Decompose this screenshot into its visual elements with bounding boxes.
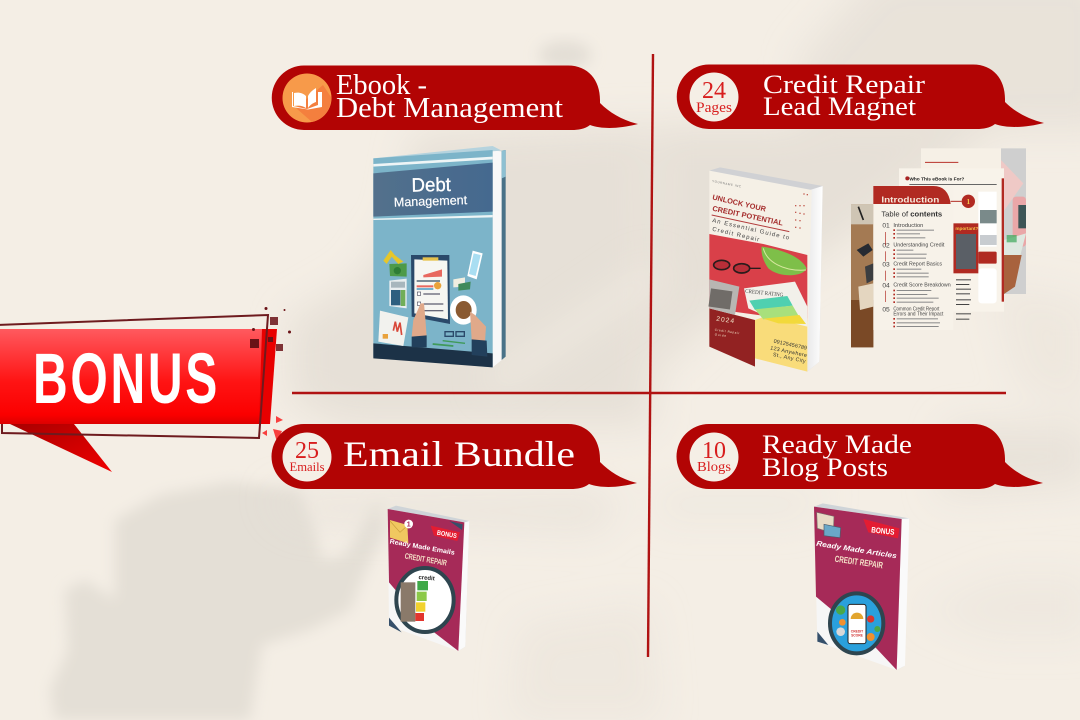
banner heading: BONUS <box>33 340 220 419</box>
page: who this ebook is for: Who This eBook is For? <box>909 176 964 182</box>
calculator <box>389 279 407 308</box>
page: table of contents: Introduction <box>893 223 923 229</box>
bubble: ebook debt management <box>272 66 638 130</box>
book: ready made emails <box>388 506 469 651</box>
book: credit repair guide: St., Any City <box>772 352 806 365</box>
badge: 24 pages: Pages <box>696 100 732 116</box>
bonus tag <box>431 526 460 541</box>
page: table of contents: Table of contents <box>881 209 942 218</box>
book: debt management <box>373 146 506 367</box>
book: ready made emails: credit <box>418 575 435 582</box>
page: table of contents: 03 <box>882 262 890 269</box>
bubble subheading: Blog Posts <box>762 453 888 482</box>
badge: 24 pages: 24 <box>702 78 726 104</box>
book: credit repair guide: UNLOCK YOUR <box>712 193 768 214</box>
badge: 10 blogs: 10 <box>702 438 726 464</box>
page: table of contents: 01 <box>882 222 890 229</box>
banner outline frame <box>0 315 268 438</box>
phone score circle <box>830 593 883 653</box>
book: credit repair guide: CREDIT RATING <box>745 289 784 299</box>
page: back <box>921 148 1026 294</box>
book: credit repair guide <box>708 167 823 372</box>
divider: horizontal <box>292 392 1006 394</box>
envelope <box>390 520 408 543</box>
page: table of contents: 02 <box>882 242 890 249</box>
bubble: email bundle <box>272 424 637 489</box>
bubble heading: Ready Made <box>762 430 912 459</box>
book: credit repair guide: An Essential Guide to <box>712 218 790 242</box>
page: who this ebook is for <box>899 168 1004 320</box>
bubble subheading: Debt Management <box>336 93 563 124</box>
book: credit repair guide: CREDIT POTENTIAL <box>712 204 784 228</box>
leaf shadow above bubble <box>539 41 591 69</box>
calculator <box>709 279 739 315</box>
badge: 25 emails <box>282 432 332 482</box>
book: ready made emails: CREDIT REPAIR <box>404 551 448 568</box>
bubble heading: Email Bundle <box>343 434 575 474</box>
page: table of contents: 1 <box>966 197 970 206</box>
hands <box>412 303 427 337</box>
confetti squares <box>250 307 291 351</box>
light streak across shadow <box>490 270 660 385</box>
banner red band <box>0 329 262 424</box>
clipboard <box>411 255 450 324</box>
bonus banner <box>0 307 291 472</box>
divider: vertical <box>648 54 653 657</box>
badge: 25 emails: 25 <box>295 438 319 464</box>
page: table of contents: Errors and Their Impact <box>893 311 944 317</box>
page: table of contents <box>873 186 975 330</box>
rating sheet <box>744 282 807 327</box>
book: ready made articles: Ready Made Articles <box>816 539 897 560</box>
glasses and pens <box>445 332 464 336</box>
bubble: credit repair lead magnet <box>677 64 1044 129</box>
badge: 10 blogs <box>690 432 738 482</box>
book: debt management: Debt <box>411 175 452 197</box>
book: ready made articles: BONUS <box>871 525 895 537</box>
book: ready made articles <box>814 503 909 670</box>
page: table of contents: Common Credit Report <box>893 307 940 313</box>
phone <box>467 251 483 279</box>
badge: 10 blogs: Blogs <box>697 460 731 475</box>
credit score circle <box>396 568 454 632</box>
page: who this ebook is for: mportant? <box>955 226 979 231</box>
book: credit repair guide: Guide <box>715 332 727 338</box>
money and coins <box>389 263 407 277</box>
confetti triangles <box>262 416 283 442</box>
bubble: ready made blog posts <box>676 424 1043 489</box>
leaf dish <box>761 247 807 275</box>
banner ribbon tail <box>10 424 112 472</box>
book: ready made emails: Ready Made Emails <box>389 538 456 557</box>
page: table of contents: Credit Score Breakdown <box>893 282 951 288</box>
book: credit repair guide: 09125456789 <box>773 339 807 352</box>
badge: 24 pages <box>690 72 738 122</box>
bonus tag <box>863 519 899 538</box>
book: ready made articles: CREDIT <box>851 629 863 633</box>
book: credit repair guide: 123 Anywhere <box>770 345 807 359</box>
book: ready made articles: SCORE <box>851 633 864 637</box>
book: credit repair guide: YOURNAME INC <box>712 179 742 189</box>
icon: open book on orange circle <box>282 74 332 122</box>
card <box>453 277 465 287</box>
book: credit repair guide: Credit Repair <box>715 328 740 335</box>
book: credit repair guide: Credit Repair <box>712 227 760 243</box>
page: table of contents: Introduction <box>881 195 939 205</box>
bubble heading: Ebook - <box>336 70 427 101</box>
document icons <box>817 512 834 533</box>
badge: 25 emails: Emails <box>290 459 324 474</box>
banner right strip <box>254 329 277 424</box>
page: table of contents: 04 <box>882 282 890 289</box>
page: table of contents: 05 <box>882 306 890 313</box>
page: table of contents: Credit Report Basics <box>893 262 942 268</box>
page: table of contents: Understanding Credit <box>893 242 945 248</box>
bubble heading: Credit Repair <box>763 70 925 99</box>
page: left photo <box>851 204 873 347</box>
book: ready made emails: 1 <box>407 520 411 529</box>
book: credit repair guide: 2024 <box>716 316 735 325</box>
book: ready made emails: BONUS <box>436 530 458 540</box>
coffee <box>450 295 477 325</box>
report sheet <box>378 311 408 346</box>
glasses <box>714 260 730 270</box>
book: ready made articles: CREDIT REPAIR <box>834 554 884 570</box>
bubble subheading: Lead Magnet <box>763 92 917 121</box>
sample pages spread <box>851 148 1026 347</box>
book: debt management: Management <box>394 193 468 210</box>
